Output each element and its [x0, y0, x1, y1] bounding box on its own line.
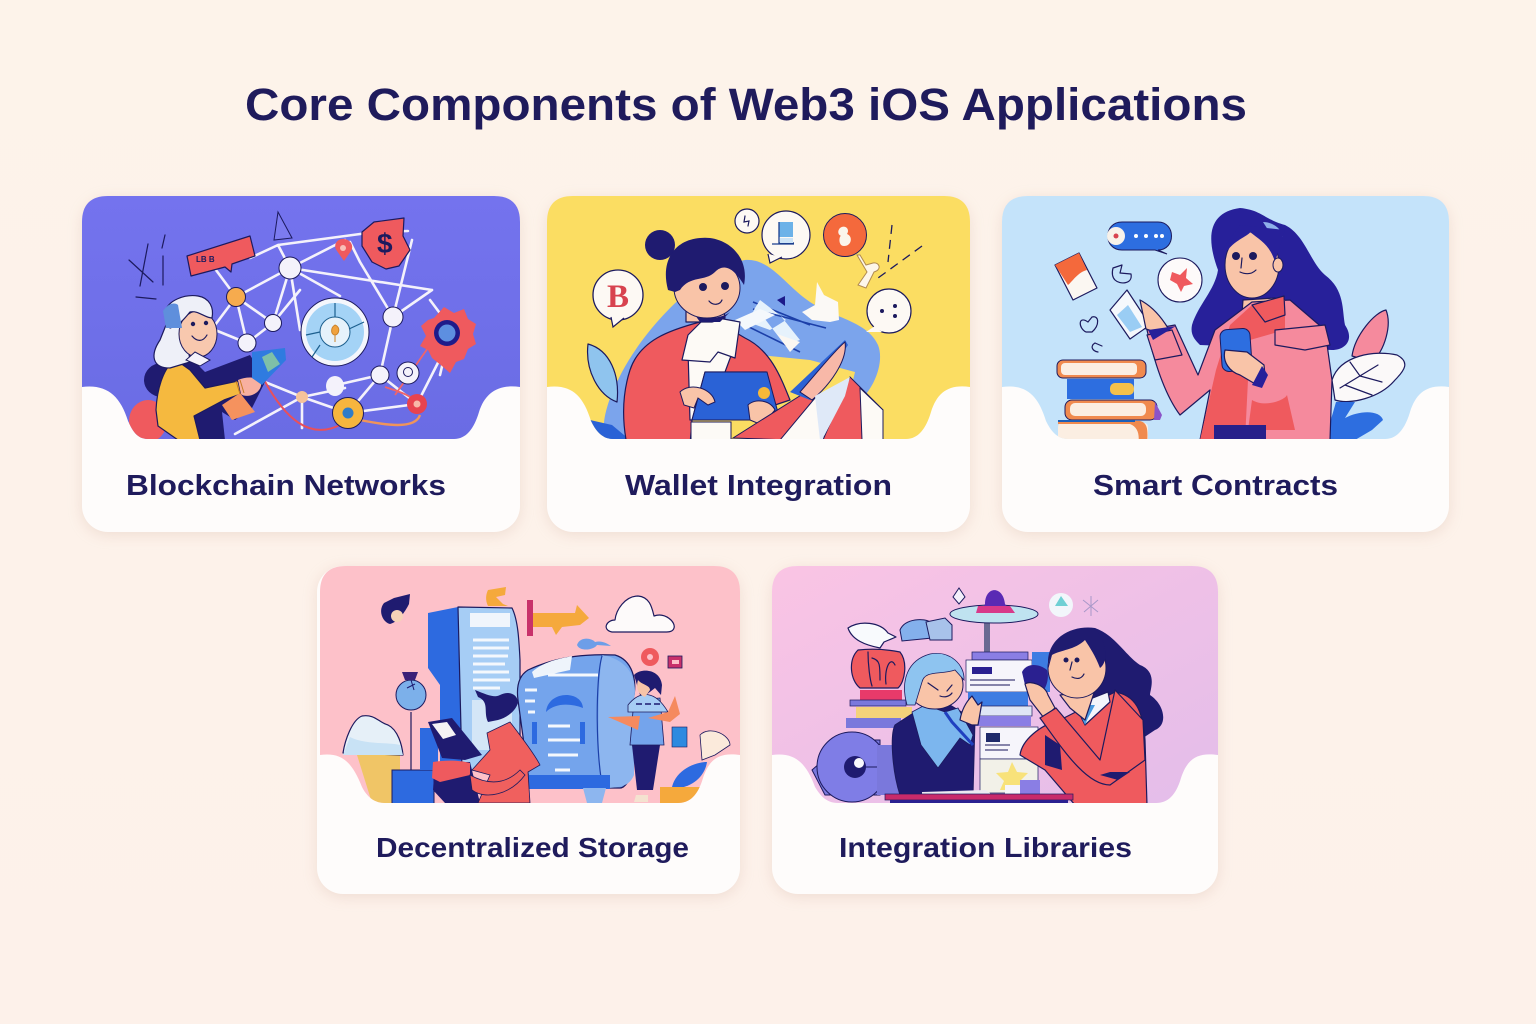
bubble: dots: [866, 289, 911, 333]
icon: balloon plant: [396, 672, 426, 772]
icon: white bird: [848, 623, 896, 648]
icon: dollar badge: [362, 218, 410, 269]
icon: sparkle: [953, 588, 965, 604]
server tower: [428, 607, 520, 770]
label: Wallet Integration: [625, 470, 892, 502]
icon: navy hook: [381, 594, 410, 624]
character: man in suit: [892, 653, 990, 798]
icon: cloud: [606, 596, 674, 632]
panel: Wallet Integration: [547, 196, 970, 532]
bubble: B: [593, 270, 643, 327]
icon: gear: [420, 307, 476, 373]
icon: plant with orange box: [660, 731, 730, 807]
panel: Integration Libraries: [772, 566, 1218, 894]
icon: blue pot: [392, 728, 438, 804]
label: Integration Libraries: [839, 832, 1132, 863]
icon: white card: [1110, 290, 1150, 339]
label: Smart Contracts: [1093, 470, 1338, 502]
bubble: B: B: [607, 279, 629, 315]
icon: left cloud and yellow box: [343, 716, 403, 803]
network nodes: [226, 257, 419, 403]
illustration: two people with books: [772, 566, 1218, 808]
character: person: [624, 230, 883, 445]
stack of documents: [966, 652, 1050, 798]
icon: red device: [187, 236, 255, 276]
icon: star bubble: [1158, 258, 1202, 302]
icons: blue items: [900, 618, 952, 641]
label: Blockchain Networks: [126, 470, 446, 502]
panel: Decentralized Storage: [317, 566, 740, 894]
icon: tree badge: [1049, 593, 1073, 617]
icon: dollar badge: $: [377, 228, 393, 259]
icon: lamp: [950, 590, 1038, 654]
icon: orange arrow: [527, 600, 589, 636]
illustration: person with phone and books: [1002, 196, 1449, 445]
panel: Blockchain Networks: [82, 196, 520, 532]
illustration: person with wallet: [547, 196, 970, 445]
icon: central coin: [301, 298, 369, 366]
icon: orange coin: [824, 214, 866, 256]
icon: sparks and key: [857, 225, 922, 288]
icon: chat bubble: [1107, 222, 1172, 254]
icons: red ring and small box: [641, 648, 682, 668]
icon: small blue cloud: [577, 639, 611, 650]
character: woman in red: [1020, 627, 1163, 805]
icon: red device: LB B: [196, 255, 215, 264]
mailbox server: [510, 655, 635, 803]
icons: small doodles: [1080, 265, 1131, 352]
label: Decentralized Storage: [376, 832, 689, 863]
illustration: servers and people: [317, 566, 740, 808]
icon: red small node: [407, 394, 427, 414]
network lines: [129, 212, 447, 434]
icon: leaves: [1325, 310, 1405, 440]
icon: purple wheel: [812, 732, 912, 802]
character: person with tablet: [129, 296, 286, 442]
icon: white cat scrap: [802, 282, 839, 322]
bubble: document: [762, 211, 810, 263]
icon: location pin: [335, 239, 352, 261]
panel: Smart Contracts: [1002, 196, 1449, 532]
bubble: small bolt: [735, 209, 759, 233]
character: woman: [1140, 208, 1349, 445]
icon: orange card: [1055, 253, 1097, 300]
illustration: blockchain network with person: [82, 196, 520, 442]
icon: books stack: [1057, 360, 1162, 445]
icon: star doodle: [1083, 596, 1098, 616]
icon: orange hub: [332, 398, 364, 428]
blue blob: [604, 260, 880, 440]
document strip: [735, 296, 826, 352]
character: person standing: [608, 671, 687, 802]
icon: leaf: [588, 344, 618, 402]
character: woman with laptop: [428, 690, 540, 803]
table: [885, 794, 1073, 805]
icon: gold C: [486, 587, 508, 606]
title: Core Components of Web3 iOS Applications: [245, 79, 1247, 130]
icon: red crown on books: [846, 649, 912, 728]
